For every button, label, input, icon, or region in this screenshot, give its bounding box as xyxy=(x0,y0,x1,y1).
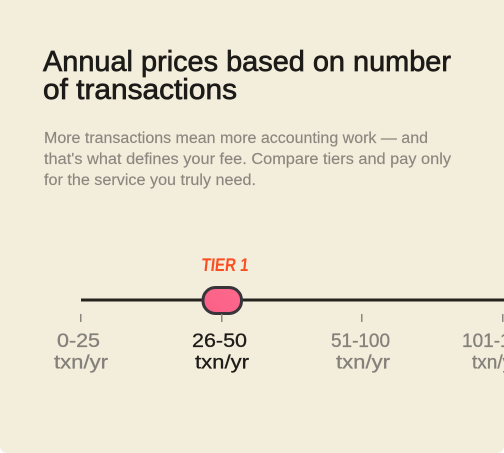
tier slider handle xyxy=(203,288,242,314)
tier option: 0-25 xyxy=(54,331,109,374)
tier option: 26-50 (selected): txn/yr xyxy=(195,352,250,374)
tier option: 51-100: txn/yr xyxy=(336,352,391,374)
timeline axis xyxy=(81,298,504,302)
tier option: 26-50 (selected): 26-50 xyxy=(192,331,247,352)
title xyxy=(43,46,451,106)
tier option: 51-100 xyxy=(331,331,391,374)
tier option: 101+ (cut off) xyxy=(462,331,504,374)
tier option: 0-25: txn/yr xyxy=(54,352,109,374)
title: of transactions xyxy=(43,74,237,106)
description text: More transactions mean more accounting work — and xyxy=(44,130,428,147)
tier option: 26-50 (selected) xyxy=(192,331,250,374)
title: Annual prices based on number xyxy=(43,46,451,78)
tier option: 51-100: 51-100 xyxy=(331,331,390,352)
description text: for the service you truly need. xyxy=(44,172,256,189)
description text: that's what defines your fee. Compare tiers and pay only xyxy=(44,151,451,168)
description text xyxy=(44,130,451,189)
tick marks xyxy=(80,314,504,322)
tier option: 0-25: 0-25 xyxy=(57,331,100,352)
tier label: TIER 1 xyxy=(201,254,250,275)
